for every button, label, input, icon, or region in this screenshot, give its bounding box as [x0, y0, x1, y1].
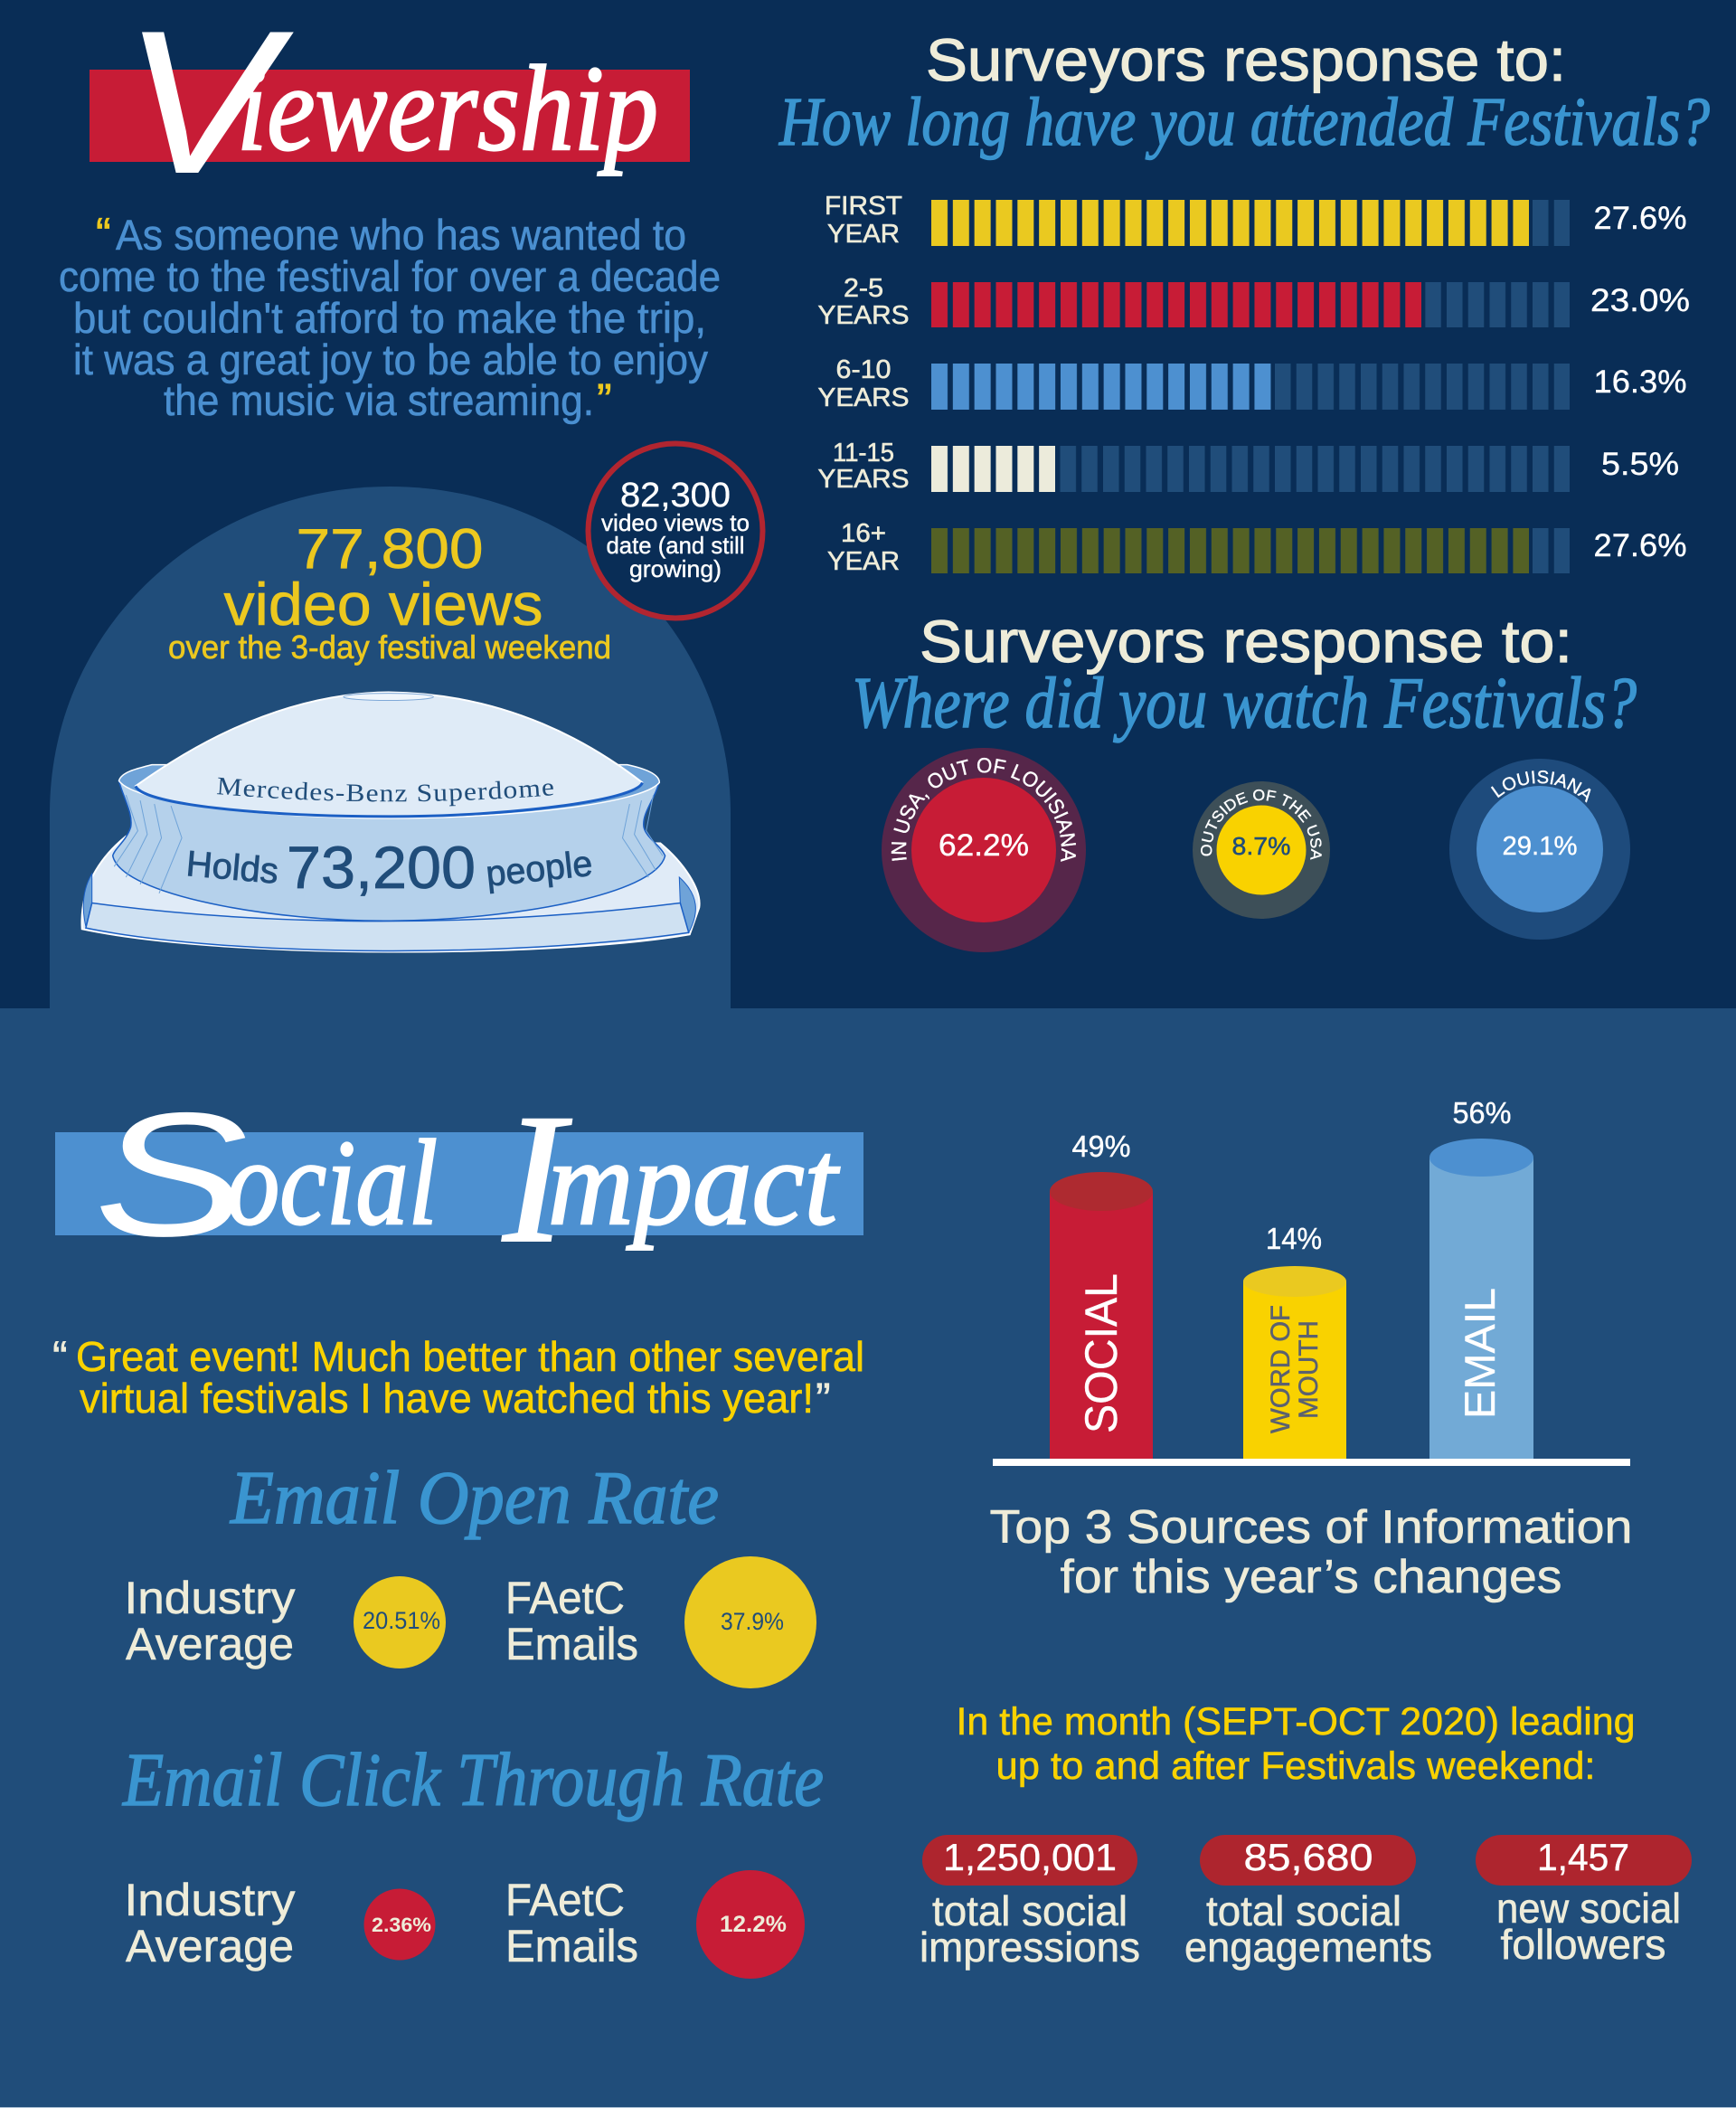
quote mark close: ”: [816, 1374, 831, 1424]
axis line: [993, 1459, 1630, 1466]
social stats intro: In the month (SEPT-OCT 2020) leading: [957, 1700, 1635, 1744]
drum ribs: [114, 795, 663, 893]
row: 6-10 years: 16.3%: [1593, 364, 1687, 400]
title banner: [90, 70, 690, 162]
FAetC label: [505, 1875, 638, 1971]
roof edge: [136, 782, 642, 817]
front band: [86, 903, 689, 950]
arch panel: [50, 487, 731, 1008]
over the weekend: over the 3-day festival weekend: [168, 629, 611, 666]
row: 11-15 years: [817, 439, 1679, 494]
social stats intro: [957, 1700, 1635, 1788]
callout: 82,300 views: [588, 443, 763, 619]
stat: total social impressions: total social: [932, 1887, 1127, 1934]
industry label: [125, 1573, 295, 1669]
quote line 1: As someone who has wanted to: [116, 211, 686, 259]
row: 2-5 years: YEARS: [817, 301, 910, 330]
heading: how long have you attended: [778, 26, 1710, 160]
chart: in USA out of Louisiana: 62.2%: [939, 828, 1029, 863]
heading: email click through rate: Email Click Through Rate: [122, 1738, 824, 1822]
chart caption: for this year’s changes: [1060, 1551, 1562, 1603]
bar: email: [1429, 1096, 1533, 1459]
row: 16+ year: [827, 519, 1687, 576]
row: 16+ year: 27.6%: [1593, 528, 1687, 563]
stat: new social followers: followers: [1501, 1921, 1665, 1968]
industry label: Average: [126, 1619, 294, 1669]
chart: in USA out of Louisiana: [882, 748, 1086, 952]
heading: where did you watch: [852, 608, 1637, 743]
row: first year: [825, 192, 1687, 249]
callout line 3: growing): [629, 555, 722, 582]
bar: social: 49%: [1072, 1130, 1130, 1163]
rim: [119, 765, 659, 818]
chart caption: Top 3 Sources of Information: [989, 1501, 1633, 1554]
chart: in USA out of Louisiana: IN USA, OUT OF LOUISIANA: [892, 758, 1076, 862]
bar: social: [1050, 1130, 1153, 1459]
FAetC label: Emails: [505, 1619, 638, 1669]
industry value: [363, 1888, 436, 1961]
bar chart: years attending: [817, 192, 1690, 576]
bar: email: EMAIL: [1456, 1288, 1504, 1419]
stat: new social followers: new social: [1496, 1885, 1681, 1932]
cylinder bar chart: [993, 1096, 1630, 1466]
chart caption: [989, 1501, 1633, 1603]
row: 11-15 years: 11-15: [833, 439, 894, 468]
social quote: [52, 1332, 864, 1424]
viewership quote: [59, 209, 721, 425]
row: 16+ year: 16+: [841, 519, 886, 548]
stadium name: Mercedes-Benz Superdome: [217, 778, 553, 807]
bottom edge line: [0, 2107, 1736, 2108]
dome roof: [136, 692, 642, 817]
heading line 1: Surveyors response to:: [926, 26, 1566, 93]
stat: total social engagements: total social: [1206, 1887, 1401, 1934]
FAetC label: FAetC: [505, 1573, 625, 1623]
row: 6-10 years: 6-10: [835, 355, 892, 384]
social impact title: [55, 1076, 863, 1281]
chart: outside of the USA: 8.7%: [1231, 832, 1291, 860]
row: 6-10 years: [817, 355, 1687, 412]
title banner: [55, 1132, 863, 1235]
quote line 1: Great event! Much better than other several: [76, 1333, 864, 1380]
dome shapes: [82, 692, 700, 952]
quote line 3: but couldn't afford to make the trip,: [73, 294, 706, 342]
video views stat: [168, 518, 611, 666]
left side wedge: [83, 874, 92, 927]
people word: people: [484, 844, 594, 894]
title I: I: [502, 1076, 572, 1281]
row: 2-5 years: 2-5: [844, 274, 883, 303]
heading: email open rate: Email Open Rate: [230, 1456, 719, 1540]
quote line 2: virtual festivals I have watched this year!: [80, 1375, 814, 1422]
row: first year: YEAR: [827, 220, 900, 249]
row: first year: 27.6%: [1593, 201, 1687, 236]
title mpact: mpact: [548, 1116, 840, 1251]
row: 6-10 years: YEARS: [817, 383, 910, 412]
stat: new social followers: 1,457: [1537, 1836, 1629, 1878]
industry value: [354, 1576, 446, 1668]
email click through comparison: [125, 1870, 805, 1979]
chart: outside of the USA: OUTSIDE OF THE USA: [1201, 789, 1322, 860]
industry label: Average: [126, 1921, 294, 1971]
holds word: Holds: [184, 844, 280, 892]
77,800: 77,800: [297, 518, 483, 581]
chart: Louisiana: LOUISIANA: [1490, 770, 1591, 803]
callout line 2: date (and still: [606, 532, 745, 559]
FAetC value: 12.2%: [720, 1912, 787, 1937]
stat: new social followers: [1476, 1835, 1692, 1968]
chart: outside of the USA: [1193, 781, 1330, 919]
stat: total social impressions: [920, 1835, 1140, 1971]
industry value: 2.36%: [372, 1914, 431, 1936]
industry value: 20.51%: [363, 1607, 440, 1634]
quote mark close: ”: [597, 374, 612, 425]
FAetC label: Emails: [505, 1921, 638, 1971]
title S: S: [94, 1076, 248, 1273]
bar: word of mouth: WORD OF: [1266, 1305, 1296, 1433]
email open rate comparison: [125, 1556, 816, 1688]
row: 11-15 years: 5.5%: [1601, 447, 1679, 482]
right side wedge: [679, 877, 695, 932]
row: 2-5 years: 23.0%: [1590, 283, 1690, 318]
row: 16+ year: YEAR: [827, 547, 900, 576]
industry label: [125, 1875, 295, 1971]
bar: word of mouth: [1243, 1222, 1346, 1459]
bar: email: 56%: [1452, 1096, 1512, 1130]
viewership title: [90, 0, 690, 216]
drum: [113, 780, 665, 921]
stat: total social engagements: engagements: [1184, 1924, 1432, 1971]
quote line 2: come to the festival for over a decade: [59, 252, 721, 300]
industry label: Industry: [125, 1875, 295, 1925]
bar: word of mouth: 14%: [1266, 1222, 1322, 1255]
quote mark open: “: [96, 209, 111, 260]
icon: Superdome illustration: [81, 691, 701, 953]
chart: Louisiana: 29.1%: [1503, 832, 1577, 861]
stat: total social engagements: 85,680: [1244, 1836, 1373, 1878]
bar: word of mouth: MOUTH: [1294, 1320, 1324, 1419]
FAetC value: [696, 1870, 805, 1979]
video views: video views: [224, 571, 542, 638]
row: 2-5 years: [817, 274, 1690, 330]
bar: social: SOCIAL: [1076, 1273, 1127, 1433]
stat: total social impressions: impressions: [920, 1924, 1140, 1971]
row: 11-15 years: YEARS: [817, 465, 910, 494]
stat: total social impressions: 1,250,001: [943, 1836, 1117, 1878]
stat: total social engagements: [1184, 1835, 1432, 1971]
panel: viewership background: [0, 0, 1736, 1008]
base platform: [82, 837, 700, 952]
callout number: 82,300: [620, 477, 731, 515]
FAetC value: [684, 1556, 816, 1688]
FAetC value: 37.9%: [721, 1608, 784, 1635]
industry label: Industry: [125, 1573, 295, 1623]
capacity number: 73,200: [287, 834, 476, 901]
roof cap: [344, 694, 433, 701]
FAetC label: [505, 1573, 638, 1669]
title letters: iewership: [237, 42, 658, 176]
social stats intro: up to and after Festivals weekend:: [996, 1744, 1595, 1788]
quote line 5: the music via streaming.: [164, 376, 594, 424]
callout line 1: video views to: [601, 509, 750, 536]
row: first year: FIRST: [825, 192, 902, 221]
callout circle: [588, 443, 763, 619]
chart: Louisiana: [1449, 759, 1630, 940]
panel: social impact background: [0, 1008, 1736, 2108]
quote line 4: it was a great joy to be able to enjoy: [73, 336, 708, 383]
quote mark open: “: [52, 1332, 68, 1383]
FAetC label: FAetC: [505, 1875, 625, 1925]
title ocial: ocial: [227, 1116, 438, 1251]
heading line 1: Surveyors response to:: [920, 608, 1572, 675]
